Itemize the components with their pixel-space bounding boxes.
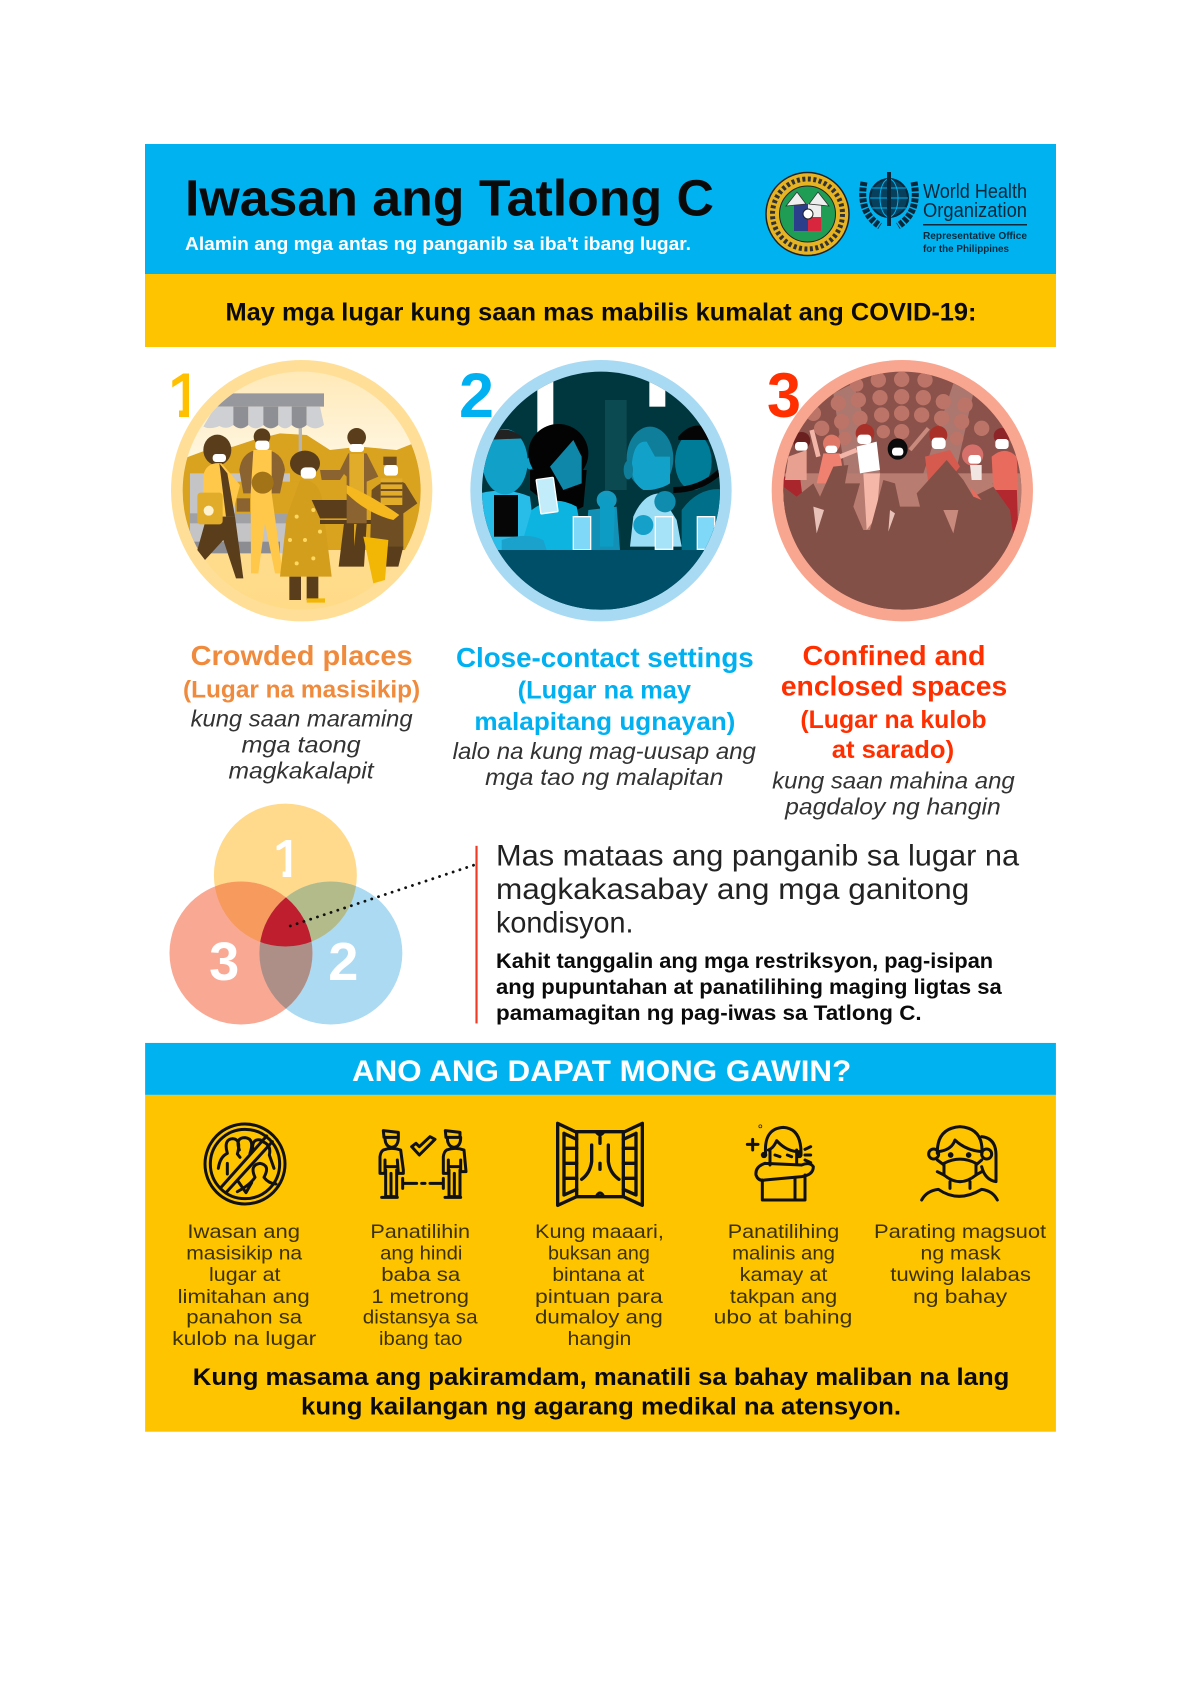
icon: no crowding	[205, 1124, 285, 1204]
action text 5: ng bahay	[913, 1286, 1007, 1308]
text: confined and enclosed spaces: kung saan mahina ang	[772, 767, 1015, 793]
callout: high risk text: kondisyon.	[496, 907, 634, 939]
callout: high risk text: ang pupuntahan at panatilihing maging ligtas sa	[496, 974, 1003, 999]
action text 2	[363, 1221, 478, 1350]
text: crowded places: magkakalapit	[229, 758, 375, 784]
illustration 3: confined party space	[772, 360, 1033, 623]
action text 3: dumaloy ang	[535, 1306, 663, 1328]
subtitle: Alamin ang mga antas ng panganib sa iba't ibang lugar.	[185, 233, 691, 254]
text: close-contact settings: malapitang ugnayan)	[474, 708, 735, 736]
logo: World Health Organization	[863, 172, 1027, 255]
action text 3: hangin	[567, 1328, 631, 1350]
action text 4: Panatilihing	[728, 1221, 839, 1243]
action text 1: kulob na lugar	[172, 1328, 317, 1350]
action text 5: ng mask	[921, 1243, 1001, 1265]
action text 2: 1 metrong	[371, 1286, 469, 1308]
action text 5: Parating magsuot	[874, 1221, 1047, 1243]
text: close-contact settings: lalo na kung mag-uusap ang	[453, 738, 756, 764]
text: confined and enclosed spaces	[772, 640, 1015, 819]
icon: cough etiquette	[747, 1126, 813, 1200]
venn diagram: 1	[273, 829, 303, 889]
action text 1: lugar at	[209, 1264, 281, 1286]
text: crowded places: Crowded places	[191, 640, 413, 671]
number 1: 1	[168, 361, 203, 431]
venn diagram: 2	[328, 932, 358, 992]
person: vendor with melon	[239, 428, 285, 573]
venn diagram	[169, 804, 477, 1025]
section banner: what to do: ANO ANG DAPAT MONG GAWIN?	[352, 1056, 851, 1088]
callout: high risk text: Kahit tanggalin ang mga restriksyon, pag-isipan	[496, 948, 993, 973]
action text 1	[172, 1221, 317, 1350]
panel: yellow actions background	[145, 1095, 1056, 1432]
action text 3: Kung maaari,	[535, 1221, 664, 1243]
text: close-contact settings	[453, 642, 756, 790]
icon: open window	[558, 1123, 642, 1205]
text: crowded places: mga taong	[242, 732, 361, 758]
action text 4: takpan ang	[730, 1286, 837, 1308]
action text 4: ubo at bahing	[714, 1306, 852, 1328]
text: crowded places: (Lugar na masisikip)	[183, 676, 420, 703]
illustration 1: crowded market	[171, 360, 432, 621]
text: close-contact settings: Close-contact settings	[456, 642, 754, 673]
action text 2: distansya sa	[363, 1306, 478, 1328]
action text 2: ang hindi	[380, 1243, 462, 1265]
callout: high risk text	[475, 840, 1020, 1025]
callout: high risk text: magkakasabay ang mga ganitong	[496, 874, 969, 906]
text: crowded places	[183, 640, 420, 784]
action text 3: bintana at	[552, 1264, 645, 1286]
text: close-contact settings: (Lugar na may	[518, 677, 691, 705]
text: confined and enclosed spaces: enclosed spaces	[781, 670, 1007, 701]
number 3: 3	[767, 361, 801, 431]
text: close-contact settings: mga tao ng malapitan	[485, 764, 723, 790]
icon: face mask	[922, 1127, 997, 1200]
closing message: kung kailangan ng agarang medikal na atensyon.	[301, 1393, 901, 1420]
person: shopper with bag	[197, 435, 243, 578]
icon: distancing	[380, 1131, 466, 1197]
action text 4: malinis ang	[732, 1243, 835, 1265]
logo: World Health Organization: Organization	[923, 199, 1027, 222]
action text 5: tuwing lalabas	[890, 1264, 1031, 1286]
header banner	[145, 144, 1056, 274]
text: confined and enclosed spaces: Confined and	[803, 640, 986, 671]
logo: Department of Health seal	[766, 172, 849, 256]
action text 3: buksan ang	[548, 1243, 650, 1265]
action text 5	[874, 1221, 1047, 1308]
action text 3	[535, 1221, 664, 1350]
section banner: what to do	[145, 1043, 1056, 1095]
illustration 2: close-contact setting	[470, 360, 733, 630]
text: confined and enclosed spaces: pagdaloy ng hangin	[784, 793, 1001, 819]
closing message: Kung masama ang pakiramdam, manatili sa bahay maliban na lang	[193, 1364, 1009, 1391]
title: Iwasan ang Tatlong C	[185, 170, 714, 226]
yellow subheading band: May mga lugar kung saan mas mabilis kumalat ang COVID-19:	[226, 298, 976, 326]
action text 2: baba sa	[381, 1264, 460, 1286]
action text 4	[714, 1221, 852, 1328]
action text 4: kamay at	[740, 1264, 828, 1286]
text: confined and enclosed spaces: at sarado)	[832, 736, 954, 764]
text: confined and enclosed spaces: (Lugar na kulob	[800, 706, 987, 734]
venn diagram: 3	[209, 932, 239, 992]
closing message	[193, 1364, 1009, 1420]
text: crowded places: kung saan maraming	[191, 706, 413, 732]
logo: World Health Organization: Representative Office	[923, 230, 1027, 242]
column texts	[145, 640, 1056, 1432]
action text 1: masisikip na	[186, 1243, 302, 1265]
action text 1: panahon sa	[186, 1306, 302, 1328]
person: apron vendor and fish carrier	[339, 428, 417, 583]
action text 1: Iwasan ang	[187, 1221, 300, 1243]
yellow subheading band	[145, 274, 1056, 347]
callout: high risk text: pamamagitan ng pag-iwas sa Tatlong C.	[496, 1000, 922, 1025]
person: woman in patterned dress	[280, 451, 377, 603]
action text 3: pintuan para	[535, 1286, 663, 1308]
logo: World Health Organization: for the Philippines	[923, 243, 1009, 255]
action text 1: limitahan ang	[178, 1286, 310, 1308]
action text 2: ibang tao	[379, 1328, 463, 1350]
callout: high risk text: Mas mataas ang panganib sa lugar na	[496, 840, 1020, 872]
action text 2: Panatilihin	[370, 1221, 470, 1243]
logo: World Health Organization: World Health	[923, 180, 1027, 203]
number 2: 2	[459, 361, 494, 431]
